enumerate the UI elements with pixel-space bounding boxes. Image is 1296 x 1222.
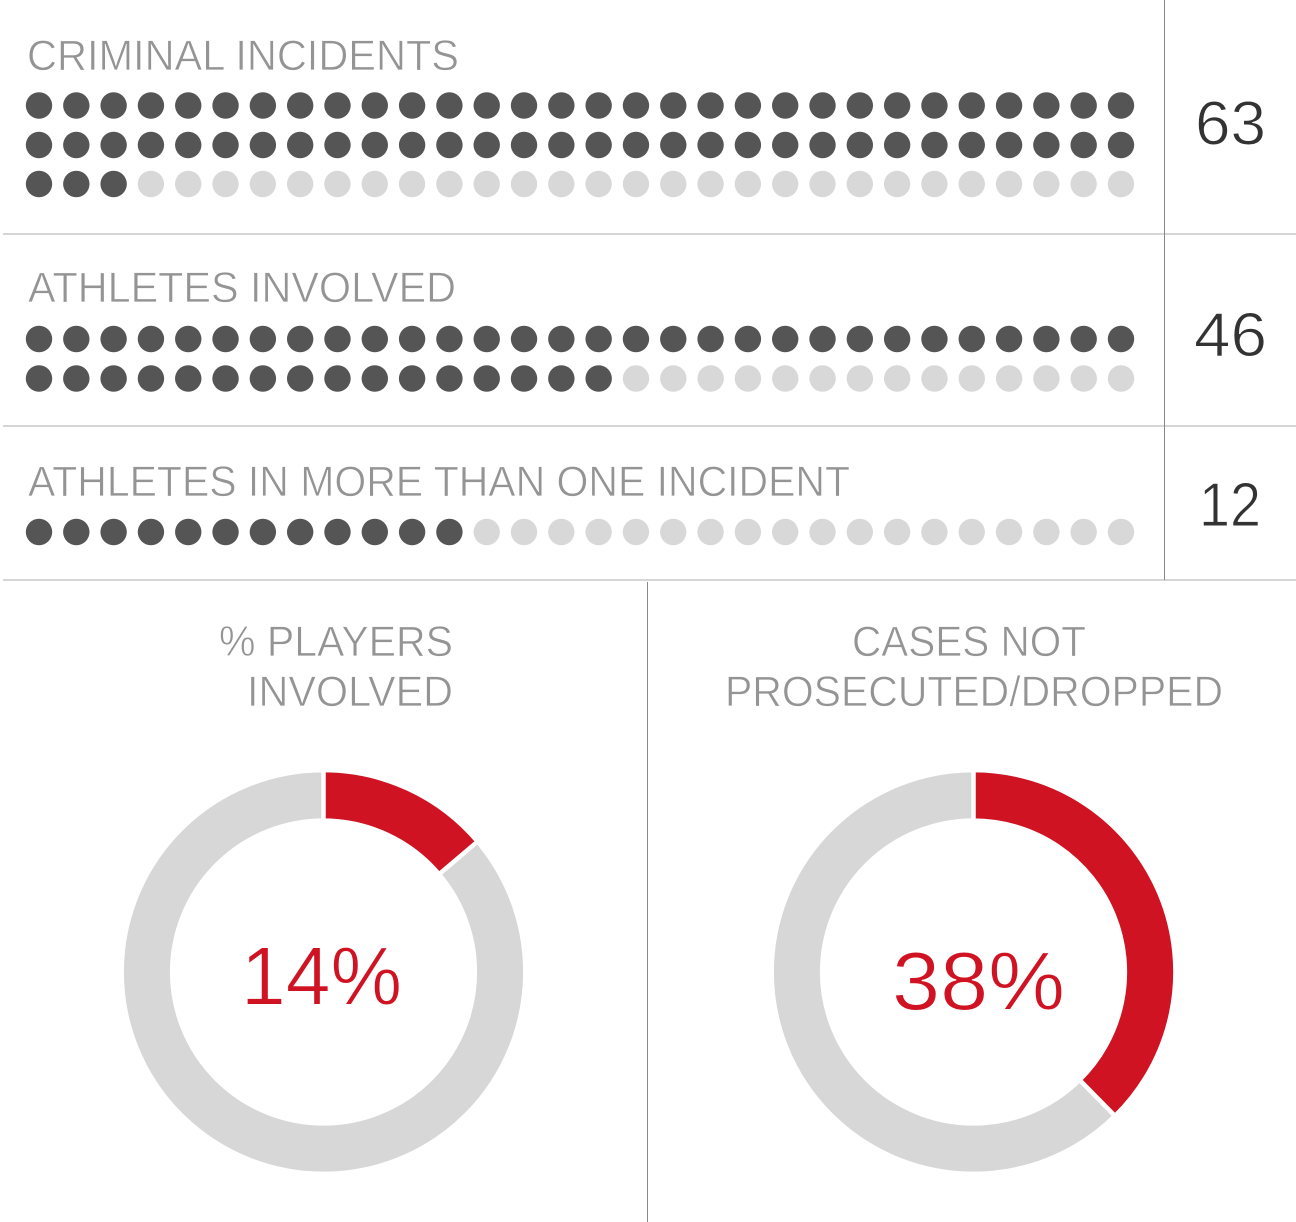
dot chart: 63 of 90: [39, 106, 1122, 184]
panel: percent players involved: [147, 618, 500, 1149]
heading: percent players involved: INVOLVED: [247, 668, 453, 716]
heading: cases not prosecuted or dropped: CASES NOT: [852, 618, 1086, 666]
heading: athletes involved: ATHLETES INVOLVED: [28, 264, 456, 312]
panel: athletes in more than one incident: [28, 458, 1261, 540]
panel: cases not prosecuted or dropped: [725, 618, 1223, 1149]
panel: athletes involved: [28, 264, 1267, 378]
heading: cases not prosecuted or dropped: PROSECUTED/DROPPED: [725, 668, 1223, 716]
value: 38%: 38%: [892, 934, 1065, 1028]
heading: athletes in more than one incident: ATHLETES IN MORE THAN ONE INCIDENT: [28, 458, 850, 506]
dot chart: 12 of 30: [39, 519, 1122, 545]
value: 63: 63: [1195, 90, 1266, 158]
donut chart: 38%: [797, 765, 1150, 1149]
donut chart: 14%: [147, 765, 500, 1149]
panel: criminal incidents: [27, 32, 1266, 184]
value: 12: 12: [1199, 471, 1261, 540]
value: 46: 46: [1194, 301, 1267, 370]
heading: criminal incidents: CRIMINAL INCIDENTS: [27, 32, 459, 80]
heading: percent players involved: [219, 618, 453, 716]
dot chart: 46 of 60: [39, 339, 1122, 378]
heading: percent players involved: % PLAYERS: [219, 618, 453, 666]
value: 14%: 14%: [241, 930, 402, 1022]
heading: cases not prosecuted or dropped: [725, 618, 1223, 716]
